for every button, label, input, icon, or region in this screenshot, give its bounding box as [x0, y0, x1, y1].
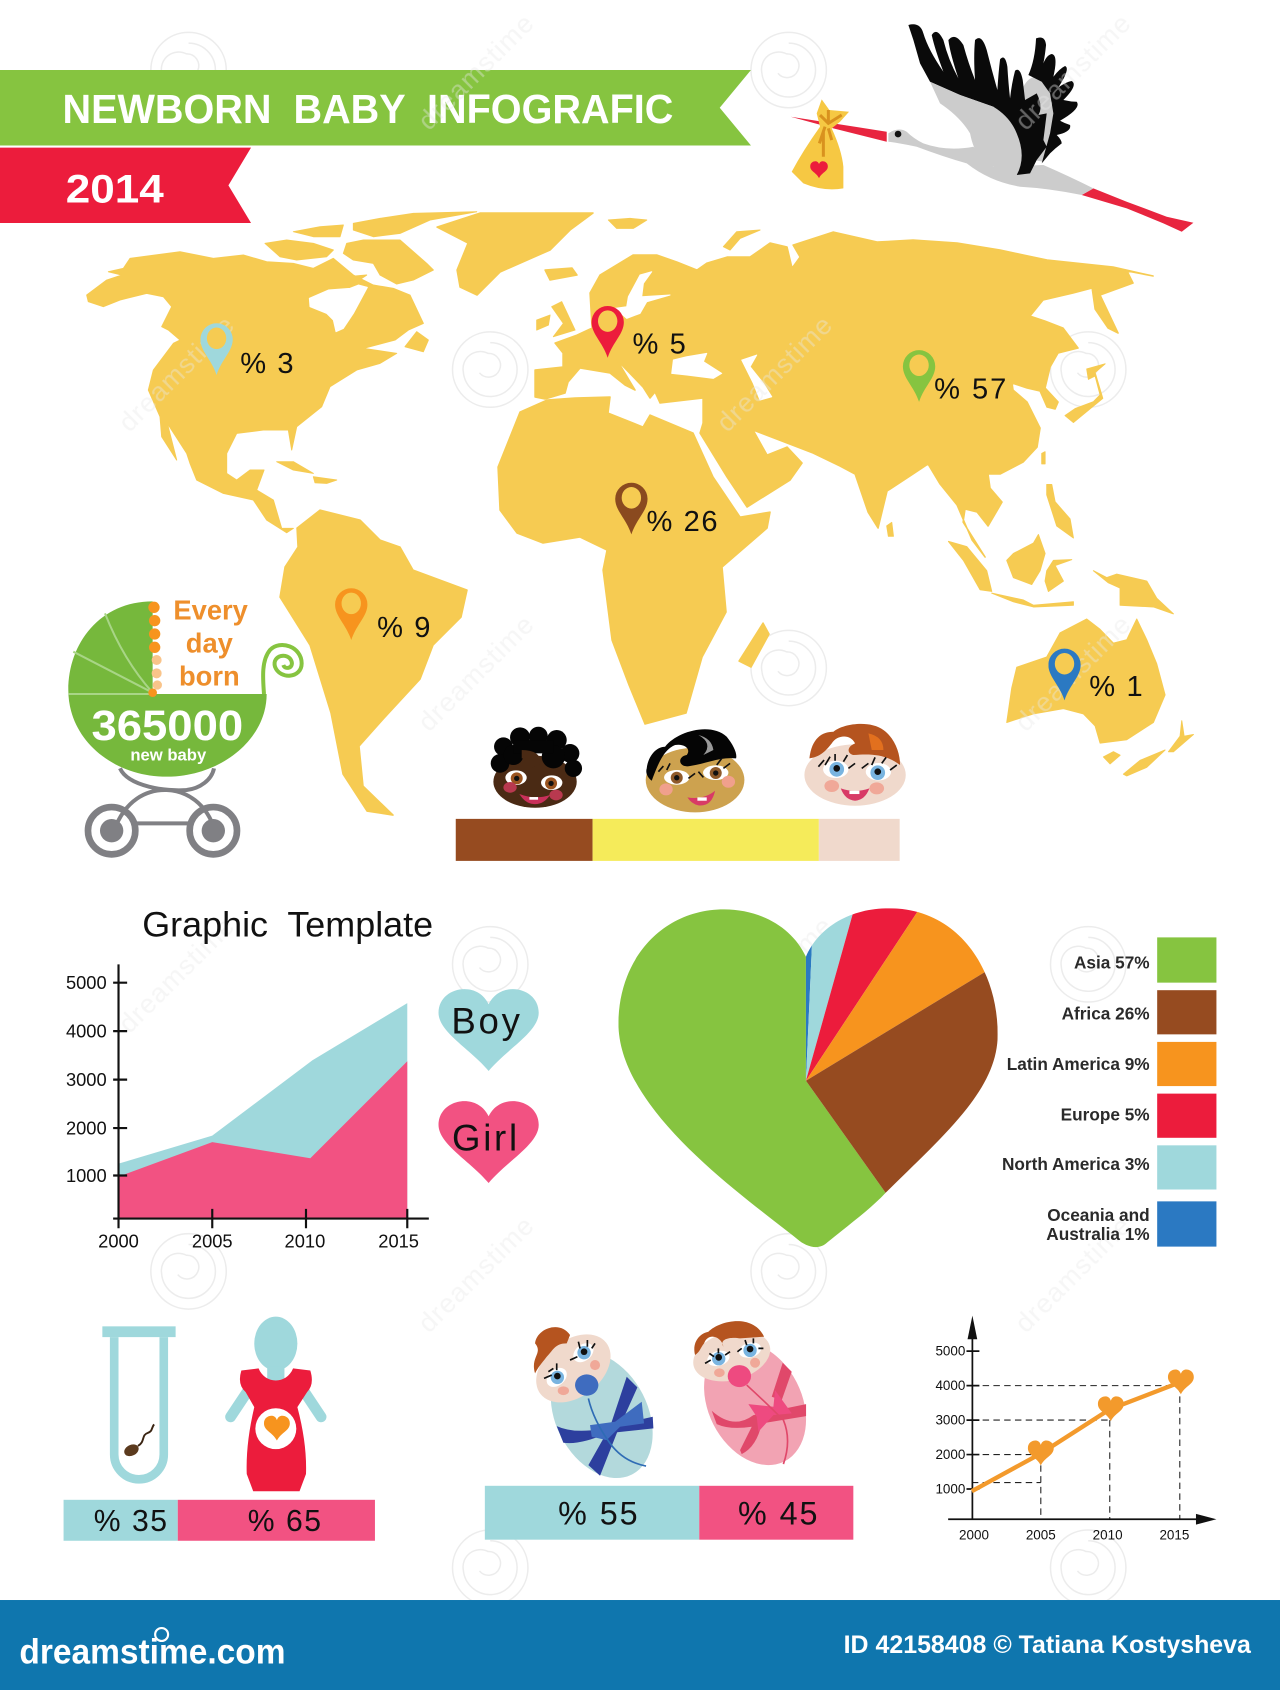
legend heart: boy: Boy	[451, 1000, 523, 1041]
x labels	[959, 1528, 1189, 1543]
iceland	[545, 268, 577, 280]
borneo	[1007, 535, 1045, 585]
greenland	[437, 213, 593, 295]
y axis labels: 2000	[66, 1118, 107, 1139]
tube cap	[102, 1326, 176, 1337]
x labels: 2010	[1093, 1528, 1123, 1543]
icon: baby pram with daily births	[68, 594, 302, 854]
bar: 35 / 65	[64, 1500, 375, 1541]
right feathers	[1028, 38, 1078, 163]
bundle	[792, 99, 849, 189]
legend: asia	[1074, 937, 1216, 983]
watermark swirls	[151, 32, 1126, 1605]
legend heart: girl: Girl	[452, 1118, 520, 1159]
girls area	[119, 1061, 407, 1219]
africa	[498, 397, 770, 724]
seas and europe islands	[537, 218, 772, 400]
watermark text: dreamstime	[412, 1210, 540, 1338]
legend: europe: Europe 5%	[1061, 1105, 1150, 1125]
slice: north america	[806, 914, 852, 1080]
footer background	[0, 1600, 1280, 1690]
madagascar	[739, 623, 769, 667]
x axis labels	[98, 1231, 419, 1252]
label: latin america: % 9	[377, 612, 432, 644]
label: north america: % 3	[240, 348, 295, 380]
pin: north america	[200, 323, 233, 375]
eurasia	[535, 232, 1153, 557]
stork beak	[791, 117, 887, 142]
boys area	[119, 1003, 407, 1219]
watermark text	[112, 7, 1137, 1338]
year banner	[0, 148, 251, 223]
blue segment: % 55	[558, 1496, 640, 1532]
caspian sea	[742, 355, 772, 400]
orange scallops	[148, 602, 160, 653]
back wing	[1023, 77, 1055, 162]
blue segment	[64, 1500, 178, 1541]
x axis labels: 2010	[285, 1231, 325, 1252]
stork legs	[1082, 188, 1193, 232]
text: every day born: Every	[173, 594, 249, 625]
y labels	[935, 1343, 965, 1496]
pin: oceania	[1048, 649, 1081, 700]
bundle knot	[819, 110, 842, 157]
watermark text: dreamstime	[710, 910, 839, 1039]
pram stand	[114, 768, 215, 831]
x axis labels: 2000	[98, 1231, 139, 1252]
head	[254, 1317, 297, 1371]
eye	[895, 131, 901, 137]
bar: 55 / 45	[485, 1486, 853, 1540]
blue segment	[485, 1486, 699, 1540]
y axis arrow	[968, 1316, 977, 1339]
tasmania	[1103, 752, 1120, 764]
text: every day born: born	[179, 661, 240, 692]
north america	[87, 212, 477, 533]
new zealand	[1123, 721, 1193, 776]
footer credit: ID 42158408 © Tatiana Kostysheva	[844, 1632, 1251, 1659]
newfoundland	[405, 332, 428, 352]
taiwan	[1042, 452, 1045, 464]
caribbean	[277, 462, 337, 483]
x labels: 2000	[959, 1528, 989, 1543]
label: oceania: % 1	[1089, 671, 1144, 703]
watermark text: dreamstime	[1009, 609, 1137, 737]
great britain	[552, 302, 575, 337]
gray wing	[930, 82, 1022, 175]
pink segment	[178, 1500, 375, 1541]
hood ribs	[68, 613, 153, 694]
trend line	[972, 1382, 1180, 1491]
x axis labels: 2005	[192, 1231, 233, 1252]
novaya zemlya	[723, 230, 760, 250]
watermark text: dreamstime	[1009, 7, 1137, 136]
sulawesi	[1045, 560, 1072, 591]
pink segment: % 65	[248, 1505, 323, 1538]
pin: latin america	[335, 588, 367, 640]
icon: pregnant woman	[231, 1317, 321, 1491]
x axis arrow	[1196, 1514, 1216, 1525]
daily birth number: 365000	[91, 702, 243, 750]
right wheel	[190, 807, 237, 854]
x axis labels: 2015	[378, 1231, 419, 1252]
x labels: 2015	[1159, 1528, 1189, 1543]
slice: latin america	[806, 912, 985, 1080]
slice: oceania	[806, 946, 812, 1080]
face: light skin	[804, 724, 906, 806]
green ribbon	[0, 70, 751, 145]
y axis labels: 4000	[66, 1021, 107, 1042]
girl baby	[684, 1321, 826, 1483]
heart pie chart	[618, 908, 998, 1248]
blue segment: % 35	[94, 1505, 169, 1538]
legend: oceania: Oceania and	[1047, 1205, 1150, 1225]
fading scallops	[152, 655, 162, 690]
legend heart: girl	[439, 1101, 539, 1183]
baltic sea	[615, 272, 670, 318]
title: NEWBORN BABY INFOGRAFIC	[62, 86, 673, 132]
small line chart	[935, 1316, 1216, 1543]
watermark text: dreamstime	[112, 910, 241, 1039]
slice: africa	[806, 972, 998, 1193]
arms	[231, 1388, 321, 1417]
pink segment: % 45	[738, 1496, 819, 1532]
legend: europe	[1061, 1094, 1216, 1138]
japan	[1065, 364, 1105, 422]
text: every day born: day	[186, 628, 234, 659]
icon: swaddled boy and girl	[523, 1320, 826, 1495]
asia islands and oceania	[887, 364, 1193, 776]
south america	[280, 510, 467, 815]
legend: oceania	[1046, 1201, 1216, 1247]
guide lines	[972, 1386, 1180, 1519]
y labels: 4000	[935, 1378, 965, 1393]
black feathers	[908, 24, 1047, 175]
dress	[240, 1368, 312, 1491]
neck	[267, 1366, 284, 1381]
watermark text: dreamstime	[412, 609, 540, 737]
y axis labels: 3000	[66, 1069, 107, 1090]
slice: europe	[806, 908, 918, 1080]
year: 2014	[66, 168, 164, 212]
y labels: 1000	[935, 1481, 965, 1496]
sumatra	[948, 541, 992, 591]
icon: stork carrying bundle	[791, 24, 1193, 232]
watermark text: dreamstime	[412, 7, 540, 136]
stork body	[888, 130, 1093, 195]
title banner	[0, 70, 751, 145]
black sea	[672, 353, 722, 378]
icon: test tube	[102, 1326, 176, 1479]
hood hub	[148, 688, 157, 697]
pin: africa	[615, 483, 648, 534]
axes	[948, 1331, 1205, 1519]
handle spiral	[263, 645, 302, 694]
x labels: 2005	[1026, 1528, 1056, 1543]
face: golden skin	[646, 729, 744, 812]
philippines	[1047, 485, 1073, 538]
sperm cell	[122, 1442, 141, 1458]
text: every day born	[173, 594, 249, 692]
legend: asia: Asia 57%	[1074, 953, 1150, 973]
label: asia: % 57	[934, 374, 1008, 406]
pram hood	[68, 601, 267, 777]
svalbard	[608, 218, 647, 228]
watermark text: dreamstime	[1009, 1210, 1137, 1338]
label: europe: % 5	[632, 328, 687, 360]
arctic islands	[265, 212, 477, 284]
y axis labels	[66, 972, 107, 1186]
watermark text: dreamstime	[112, 309, 241, 437]
watermark text: dreamstime	[710, 309, 839, 437]
legend: north america	[1002, 1145, 1216, 1190]
icon: three baby faces	[491, 724, 906, 812]
y labels: 3000	[935, 1412, 965, 1427]
yellow segment	[593, 819, 819, 861]
pie legend	[1002, 937, 1216, 1247]
face: dark skin	[491, 727, 582, 808]
y axis labels: 5000	[66, 972, 107, 993]
legend: latin america	[1007, 1042, 1216, 1086]
pink segment	[699, 1486, 853, 1540]
brown segment	[456, 819, 593, 861]
boy baby	[523, 1320, 673, 1495]
heart markers	[1028, 1369, 1194, 1465]
left wheel	[88, 807, 135, 854]
y axis labels: 1000	[66, 1165, 107, 1186]
java	[992, 593, 1073, 607]
pale segment	[819, 819, 900, 861]
legend: africa	[1062, 990, 1216, 1034]
chart axes	[113, 964, 429, 1228]
legend: africa: Africa 26%	[1062, 1003, 1150, 1023]
new baby caption: new baby	[130, 746, 207, 765]
legend: latin america: Latin America 9%	[1007, 1054, 1150, 1074]
y labels: 5000	[935, 1343, 965, 1358]
heading: graphic template: Graphic Template	[142, 904, 433, 944]
tube glass	[114, 1337, 164, 1479]
hudson bay	[309, 285, 367, 332]
australia	[1007, 619, 1165, 743]
sri lanka	[887, 522, 893, 536]
bundle heart	[810, 161, 828, 178]
footer bar	[0, 1600, 1280, 1690]
y labels: 2000	[935, 1447, 965, 1462]
world map	[87, 212, 1193, 815]
footer site name: dreamstime.com	[19, 1632, 286, 1672]
pin: asia	[903, 350, 935, 402]
legend: oceania: Australia 1%	[1046, 1224, 1150, 1244]
pin: europe	[592, 306, 624, 358]
red ribbon	[0, 148, 251, 223]
label: africa: % 26	[646, 506, 719, 538]
area chart	[66, 964, 429, 1252]
footer swirl	[155, 1628, 168, 1641]
new guinea	[1093, 571, 1173, 614]
ethnicity share bar	[456, 819, 900, 861]
legend heart: boy	[439, 989, 539, 1071]
ireland	[537, 315, 550, 330]
belly heart	[264, 1416, 290, 1441]
slice: asia	[618, 909, 886, 1248]
belly	[255, 1408, 296, 1449]
legend: north america: North America 3%	[1002, 1154, 1150, 1174]
